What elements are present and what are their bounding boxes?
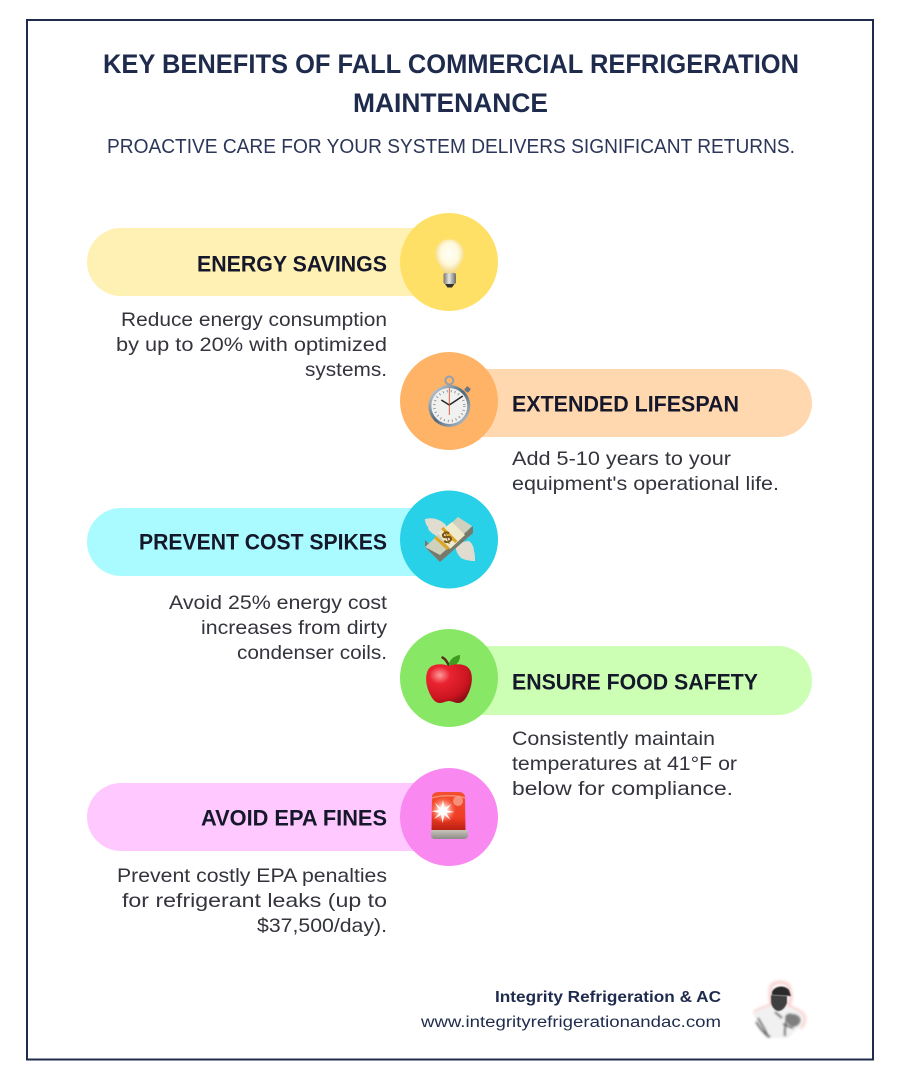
text: extended lifespan: Add 5-10 years to your [512, 448, 732, 470]
panel: prevent cost spikes [87, 490, 498, 664]
footer: company name: Integrity Refrigeration & AC [495, 989, 721, 1006]
text: avoid epa fines [117, 865, 387, 937]
pill: energy savings [87, 228, 449, 296]
icon: stopwatch [428, 376, 471, 427]
text: ensure food safety: Consistently maintain [512, 728, 715, 750]
title: KEY BENEFITS OF FALL COMMERCIAL REFRIGERATION [103, 49, 799, 79]
heading: avoid epa fines: AVOID EPA FINES [201, 806, 387, 830]
text: prevent cost spikes: condenser coils. [237, 642, 387, 664]
text: ensure food safety: below for compliance. [512, 778, 733, 800]
text: prevent cost spikes: increases from dirty [201, 617, 387, 639]
text: ensure food safety: temperatures at 41°F or [512, 753, 738, 775]
pill: prevent cost spikes [87, 508, 449, 576]
text: prevent cost spikes: Avoid 25% energy cost [169, 592, 388, 614]
subtitle: PROACTIVE CARE FOR YOUR SYSTEM DELIVERS SIGNIFICANT RETURNS. [107, 136, 795, 158]
pill: ensure food safety [449, 646, 812, 715]
footer: website: www.integrityrefrigerationandac.com [420, 1014, 721, 1031]
icon: siren light [430, 792, 468, 839]
title: MAINTENANCE [353, 88, 548, 118]
badge: extended lifespan [400, 352, 498, 450]
text: extended lifespan: equipment's operational life. [512, 473, 779, 495]
logo: technician sketch [754, 982, 804, 1038]
icon: red apple [426, 655, 472, 703]
text: extended lifespan [512, 448, 779, 495]
text: avoid epa fines: for refrigerant leaks (up to [122, 890, 387, 912]
panel: avoid epa fines [87, 768, 498, 937]
badge: prevent cost spikes [400, 490, 498, 588]
icon: light bulb [436, 240, 464, 288]
panel: energy savings [87, 213, 498, 381]
pill: avoid epa fines [87, 783, 449, 851]
title [103, 49, 799, 118]
panel: ensure food safety [400, 629, 812, 800]
text: prevent cost spikes [169, 592, 388, 664]
heading: energy savings: ENERGY SAVINGS [197, 252, 387, 276]
text: energy savings: by up to 20% with optimized [116, 334, 387, 356]
text: energy savings: systems. [305, 359, 387, 381]
badge: avoid epa fines [400, 768, 498, 866]
text: energy savings: Reduce energy consumption [121, 309, 387, 331]
panel: extended lifespan [400, 352, 812, 495]
text: ensure food safety [512, 728, 738, 800]
heading: ensure food safety: ENSURE FOOD SAFETY [512, 670, 758, 694]
heading: extended lifespan: EXTENDED LIFESPAN [512, 392, 739, 416]
text: energy savings [116, 309, 387, 381]
icon: money with wings [425, 517, 475, 562]
heading: prevent cost spikes: PREVENT COST SPIKES [139, 530, 387, 554]
badge: ensure food safety [400, 629, 498, 727]
text: avoid epa fines: $37,500/day). [257, 915, 387, 937]
pill: extended lifespan [449, 369, 812, 437]
badge: energy savings [400, 213, 498, 311]
icon: money with wings: $ [439, 527, 455, 548]
text: avoid epa fines: Prevent costly EPA penalties [117, 865, 387, 887]
